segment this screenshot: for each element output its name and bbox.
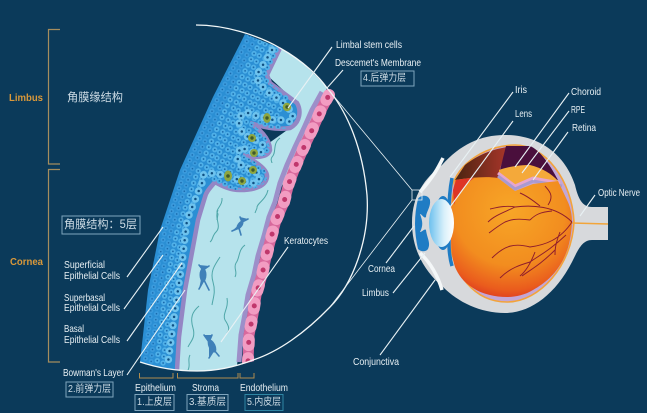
callout: layer 2: 2.前弹力层	[68, 382, 111, 395]
callout: layer 2	[66, 382, 113, 397]
bracket: endothelium	[240, 373, 254, 378]
label: basal epithelial cells	[64, 263, 182, 346]
callout: five layers: 角膜结构：5层	[64, 217, 137, 231]
label: Bowman's layer	[63, 290, 185, 379]
retina layers	[498, 165, 562, 189]
label: limbus: Limbus	[362, 287, 389, 299]
basement membrane	[177, 48, 299, 370]
label: limbal stem cells: Limbal stem cells	[336, 39, 402, 51]
label: retina	[533, 122, 596, 180]
choroid shell	[449, 145, 574, 302]
chart: corneal cross-section	[140, 25, 367, 371]
callout: layer 4	[361, 71, 414, 86]
magnifier circle outline	[140, 25, 367, 371]
limbal stem cells	[224, 103, 291, 185]
label: Limbus: Limbus	[9, 92, 43, 104]
panel: cornea heading and bracket	[10, 170, 140, 362]
callout: layer 4: 4.后弹力层	[363, 71, 406, 84]
label: stroma: Stroma	[192, 382, 219, 394]
label: superbasal epithelial cells	[64, 255, 163, 314]
label: Cornea: Cornea	[10, 256, 43, 268]
label: superficial epithelial cells: Epithelial Cells	[64, 270, 120, 282]
label: limbal stem cells	[288, 39, 402, 108]
label: Descemet's membrane: Descemet's Membrane	[335, 57, 421, 69]
chart: eyeball	[412, 135, 608, 313]
zoom connector lines	[327, 88, 412, 307]
sclera	[412, 135, 608, 313]
panel: eye labels	[353, 84, 640, 368]
retinal vessels	[488, 186, 572, 278]
bracket: epithelium	[140, 373, 173, 378]
label: Descemet's membrane	[327, 57, 421, 88]
label: cornea: Cornea	[368, 263, 395, 275]
epithelium	[140, 34, 303, 370]
panel: bottom layer labels	[135, 373, 288, 410]
stroma fibres	[188, 138, 280, 370]
bracket: stroma	[178, 373, 238, 378]
bracket: limbus	[48, 30, 60, 164]
conjunctiva	[420, 158, 443, 290]
label: superficial epithelial cells	[64, 227, 163, 282]
callout: layer 1: 1.上皮层	[137, 395, 172, 408]
label: limbus	[362, 253, 425, 299]
endothelium cells	[248, 95, 329, 362]
label: RPE	[522, 104, 585, 173]
label: iris	[450, 84, 527, 177]
label: lens: Lens	[515, 108, 532, 120]
callout: five layers	[62, 216, 140, 234]
label: cornea	[368, 226, 414, 275]
label: endothelium: Endothelium	[240, 382, 288, 394]
label: keratocytes	[221, 235, 328, 342]
label: superficial epithelial cells: Superficial	[64, 259, 105, 271]
callout: layer 5: 5.内皮层	[247, 395, 281, 408]
keratocyte cells	[199, 217, 248, 358]
label: choroid	[515, 86, 601, 167]
Descemet's membrane	[239, 92, 322, 362]
callout: layer 5	[245, 394, 283, 410]
label: RPE: RPE	[571, 104, 585, 116]
posterior cavity: brown	[455, 147, 507, 180]
callout: layer 3: 3.基质层	[189, 395, 226, 408]
label: choroid: Choroid	[571, 86, 601, 98]
label: retina: Retina	[572, 122, 596, 134]
label: conjunctiva: Conjunctiva	[353, 356, 399, 368]
zoom marker box	[412, 190, 422, 200]
label: conjunctiva	[353, 280, 435, 368]
callout: layer 3	[187, 394, 228, 410]
iris and ciliary strip	[449, 178, 452, 266]
optic nerve core	[572, 223, 608, 224]
panel: limbus heading and bracket	[9, 30, 123, 164]
lens	[429, 199, 454, 247]
basal cell row	[168, 50, 293, 363]
label: superbasal epithelial cells: Superbasal	[64, 292, 105, 304]
label: Bowman's layer: Bowman's Layer	[63, 367, 124, 379]
bracket: cornea	[48, 170, 60, 362]
label: lens	[450, 108, 532, 207]
label: iris: Iris	[515, 84, 527, 96]
panel: upper and middle section labels	[221, 39, 421, 342]
stroma layer	[177, 48, 327, 371]
text: limbus structure: 角膜缘结构	[67, 90, 123, 104]
label: epithelium: Epithelium	[135, 382, 176, 394]
label: optic nerve	[580, 187, 640, 216]
label: basal epithelial cells: Epithelial Cells	[64, 334, 120, 346]
label: basal epithelial cells: Basal	[64, 323, 84, 335]
vitreous globe	[450, 177, 572, 297]
panel: left cell labels	[63, 227, 185, 397]
red patch at anterior retina	[453, 178, 474, 205]
label: superbasal epithelial cells: Epithelial Cells	[64, 302, 120, 314]
posterior cavity: maroon	[499, 146, 558, 180]
callout: layer 1	[135, 394, 174, 410]
label: keratocytes: Keratocytes	[284, 235, 328, 247]
anterior chamber	[415, 196, 452, 251]
